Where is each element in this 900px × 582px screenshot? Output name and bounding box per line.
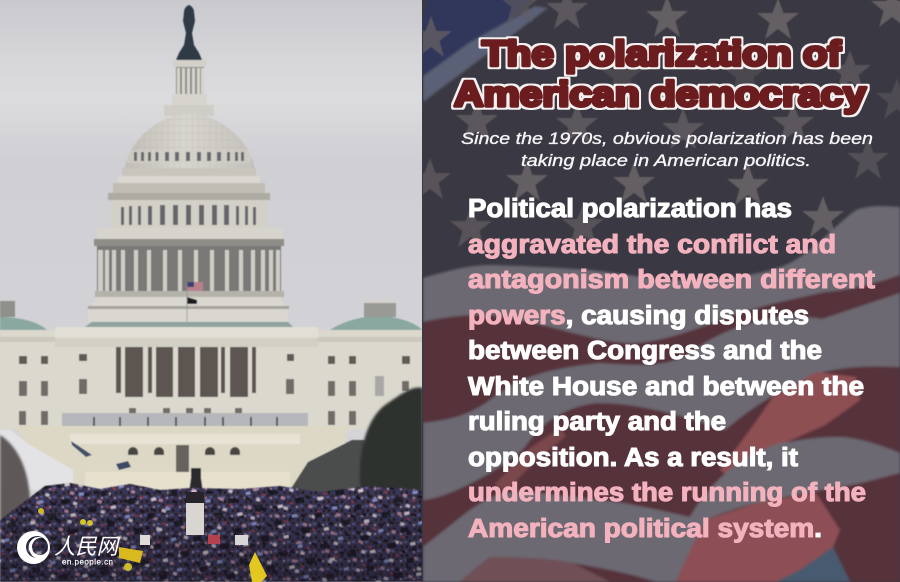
body text: opposition. As a result, it — [468, 444, 799, 472]
photo: terrace and scaffolding — [0, 413, 365, 495]
subtitle: Since the 1970s, obvious polarization has been — [461, 129, 873, 148]
photo: trees — [0, 387, 423, 520]
title: The polarization of — [482, 34, 841, 74]
body text — [468, 195, 876, 543]
body text: Political polarization has — [468, 195, 792, 223]
icon: American flag on the Capitol — [187, 282, 203, 322]
photo: Capitol dome — [88, 5, 289, 322]
logo: People's Daily Online — [17, 529, 121, 566]
photo: crowd with flags — [0, 483, 423, 582]
logo: People's Daily Online: en.people.cn — [62, 558, 113, 566]
panel: flag background with text — [409, 0, 900, 582]
body text: between Congress and the — [468, 337, 822, 365]
photo: Capitol wings and facade — [0, 301, 423, 430]
body text: American political system . — [468, 515, 822, 543]
body text: powers , causing disputes — [468, 302, 809, 330]
body text: ruling party and the — [468, 408, 726, 436]
body text: antagonism between different — [468, 266, 876, 294]
title — [454, 34, 866, 114]
subtitle — [461, 129, 873, 170]
body text: aggravated the conflict and — [468, 231, 836, 259]
flag canton, blue corner — [423, 0, 530, 80]
body text: undermines the running of the — [468, 479, 866, 507]
flag stars — [409, 0, 900, 247]
panel: Capitol photograph — [0, 0, 423, 582]
logo: People's Daily Online: 人民网 — [54, 529, 121, 561]
crowd texture — [0, 483, 423, 582]
title: American democracy — [454, 74, 866, 114]
flag stripes — [423, 206, 900, 582]
body text: White House and between the — [468, 373, 864, 401]
subtitle: taking place in American politics. — [521, 151, 811, 170]
